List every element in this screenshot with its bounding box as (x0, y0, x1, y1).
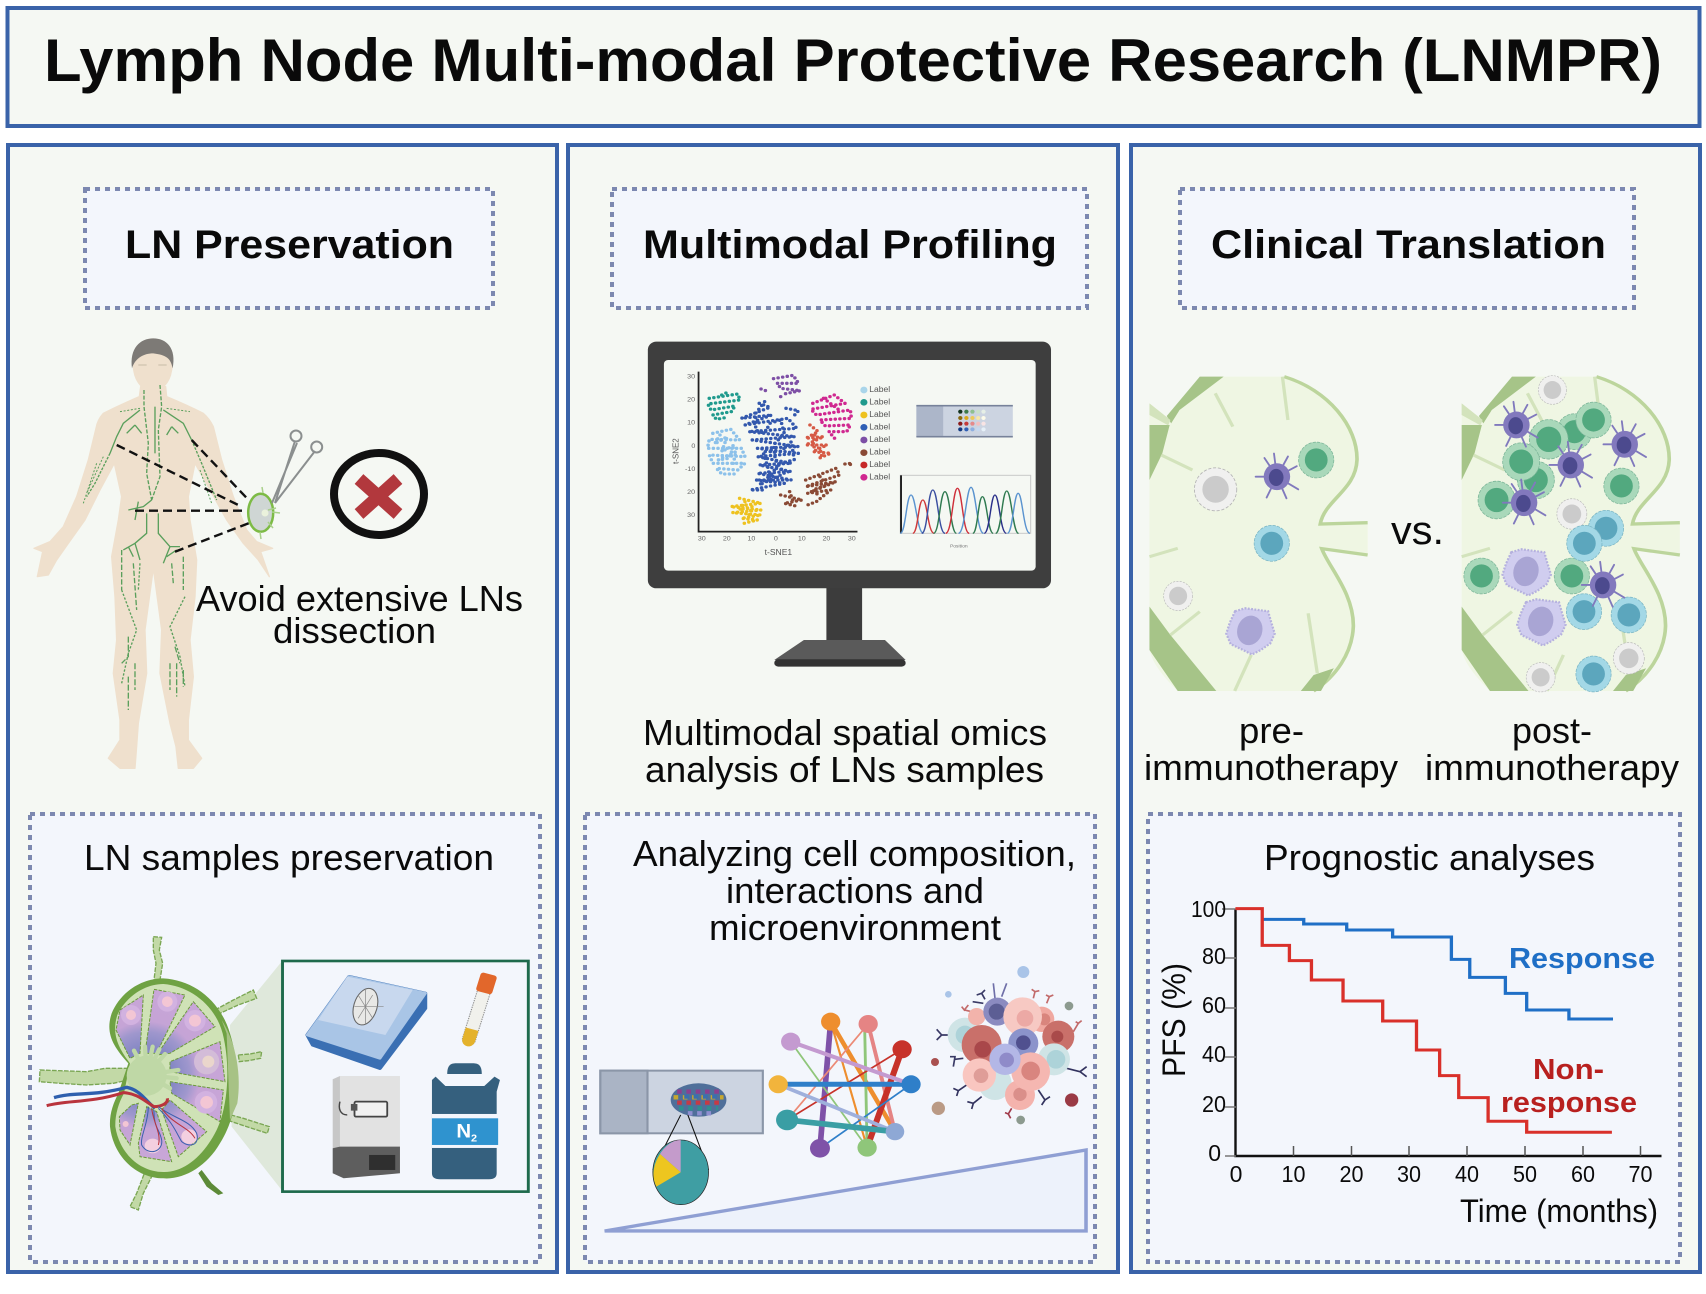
tumour microenvironment cell cluster (931, 966, 1087, 1124)
x axis labels: 10 (1282, 1161, 1306, 1187)
label: post-immunotherapy (1425, 710, 1679, 788)
x axis labels: 40 (1455, 1161, 1479, 1187)
t-SNE scatter plot: t-SNE1 (765, 548, 793, 557)
text: multimodal spatial omics (643, 712, 1047, 790)
monitor stand (774, 587, 906, 667)
scatter legend: Label (869, 473, 890, 481)
x axis labels (1230, 1161, 1652, 1187)
axes and ticks (1222, 909, 1662, 1156)
t-SNE scatter plot: 0 (774, 536, 778, 543)
t-SNE scatter plot: 0 (691, 443, 696, 450)
title text: Lymph Node Multi-modal Protective Research (LNMPR) (44, 27, 1662, 94)
t-SNE scatter plot: -10 (685, 466, 695, 473)
icon: liquid nitrogen tank: N (456, 1121, 471, 1142)
label: pre-immunotherapy: pre- (1239, 710, 1304, 751)
x axis labels: 60 (1571, 1161, 1595, 1187)
panel: LN Preservation (8, 145, 557, 1272)
scatter legend: Label (869, 410, 890, 419)
icon: tissue stage (307, 977, 425, 1068)
inset: preservation equipment (283, 961, 528, 1192)
label: Non-response: Non- (1533, 1054, 1604, 1086)
sub-panel: prognostic analyses (1148, 814, 1680, 1262)
text: avoid extensive dissection (196, 578, 523, 651)
panel: Clinical Translation (1131, 145, 1700, 1272)
label: pre-immunotherapy: immunotherapy (1144, 747, 1398, 788)
t-SNE scatter plot: 30 (687, 512, 695, 519)
label: Non-response: response (1501, 1087, 1637, 1119)
icon: liquid nitrogen tank: 2 (471, 1133, 477, 1144)
text: multimodal spatial omics: Multimodal spatial omics (643, 712, 1047, 753)
scatter legend (860, 385, 890, 481)
heading: Multimodal Profiling: Multimodal Profiling (643, 223, 1057, 267)
sub-heading: microenvironment (709, 907, 1001, 948)
label: pre-immunotherapy (1144, 710, 1398, 788)
monitor screen (664, 360, 1036, 571)
monitor frame (648, 342, 1051, 588)
label: Response: Response (1509, 943, 1655, 975)
scatter legend: Label (869, 423, 890, 431)
x axis title: Time (months) (1460, 1193, 1658, 1229)
heading: LN Preservation: LN Preservation (125, 223, 454, 267)
icon: surgical scissors (272, 430, 322, 503)
gradient wedge (605, 1150, 1086, 1231)
dashed lines to excised node (117, 440, 250, 552)
y axis labels: 60 (1202, 992, 1226, 1018)
slide with tissue and pie chart (600, 1071, 763, 1205)
illustration: pre-immunotherapy lymph node (1149, 377, 1368, 691)
t-SNE scatter plot: 10 (687, 420, 695, 427)
t-SNE scatter plot: 20 (723, 536, 731, 543)
sub-heading: LN samples preservation (84, 837, 494, 878)
sub-heading (633, 833, 1076, 948)
sub-panel: LN samples preservation (30, 814, 540, 1262)
heading: Multimodal Profiling (612, 189, 1087, 308)
response curve (1262, 919, 1613, 1019)
y axis labels (1191, 896, 1226, 1166)
y axis labels: 80 (1202, 943, 1226, 969)
heading: Clinical Translation (1180, 189, 1634, 308)
t-SNE scatter plot: 30 (698, 536, 706, 543)
scatter legend: Label (869, 435, 890, 444)
title banner (8, 8, 1700, 126)
x axis labels: 20 (1340, 1161, 1364, 1187)
network graph (769, 1013, 921, 1158)
heading: LN Preservation (85, 189, 493, 308)
y axis title: PFS (%) (1156, 963, 1192, 1077)
illustration: post-immunotherapy lymph node (1462, 376, 1680, 692)
t-SNE scatter plot: 30 (848, 536, 856, 543)
icon: human body with lymphatic system (34, 338, 273, 768)
t-SNE scatter plot: 20 (687, 489, 695, 496)
label: vs.: vs. (1391, 509, 1444, 553)
sequencing chromatogram (900, 475, 1031, 549)
t-SNE scatter plot: 10 (798, 536, 806, 543)
scatter legend: Label (869, 448, 890, 457)
icon: excised lymph node (248, 487, 280, 539)
sub-panel: analyzing cell composition (585, 814, 1095, 1262)
sub-heading: Analyzing cell composition, (633, 833, 1076, 874)
text: avoid extensive dissection: Avoid extensive LNs (196, 578, 523, 619)
label: post-immunotherapy: immunotherapy (1425, 747, 1679, 788)
t-SNE scatter plot: 30 (687, 374, 695, 381)
t-SNE scatter plot: 10 (747, 536, 756, 543)
Kaplan-Meier chart (1156, 896, 1662, 1229)
heading: Clinical Translation: Clinical Translation (1211, 223, 1606, 267)
sub-heading: Prognostic analyses (1264, 837, 1595, 878)
panel: Multimodal Profiling (568, 145, 1118, 1272)
t-SNE scatter plot: 20 (822, 536, 831, 543)
y axis labels: 20 (1202, 1091, 1226, 1117)
illustration: lymph node anatomy (39, 937, 282, 1210)
x axis labels: 0 (1230, 1161, 1242, 1187)
sequencing chromatogram: Position (950, 543, 968, 549)
x axis labels: 30 (1397, 1161, 1421, 1187)
icon: ultra-low freezer (333, 1076, 400, 1178)
spatial slide thumbnail (916, 405, 1013, 437)
illustration: computer monitor with spatial omics plots (648, 342, 1051, 667)
x axis labels: 50 (1513, 1161, 1537, 1187)
x axis labels: 70 (1628, 1161, 1652, 1187)
text: avoid extensive dissection: dissection (273, 610, 436, 651)
sub-heading: interactions and (726, 870, 984, 911)
label: post-immunotherapy: post- (1512, 710, 1592, 751)
icon: red cross in black circle (334, 453, 424, 535)
scatter legend: Label (869, 460, 890, 469)
y axis labels: 0 (1208, 1140, 1221, 1166)
icon: liquid nitrogen tank (432, 1063, 500, 1179)
y axis labels: 40 (1202, 1041, 1226, 1067)
text: multimodal spatial omics: analysis of LNs samples (645, 749, 1044, 790)
scatter legend: Label (869, 398, 890, 407)
scatter legend: Label (869, 385, 890, 394)
y axis labels: 100 (1191, 896, 1226, 922)
non-response curve (1235, 909, 1612, 1132)
t-SNE scatter plot: 20 (687, 397, 695, 404)
icon: sample tube (459, 972, 497, 1048)
t-SNE scatter plot (671, 372, 857, 557)
t-SNE scatter plot: t-SNE2 (671, 438, 681, 464)
label: Non-response (1501, 1054, 1637, 1119)
